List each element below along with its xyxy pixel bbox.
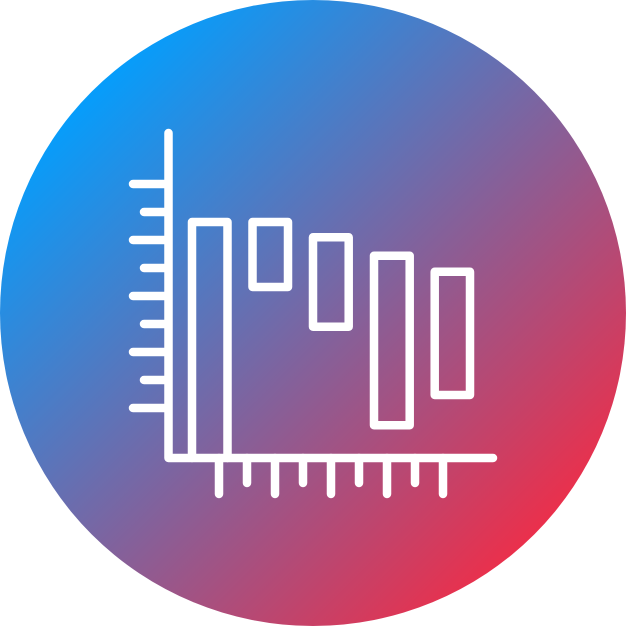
bar 4 <box>374 256 410 425</box>
bar 2 <box>252 222 288 287</box>
bar 3 <box>313 237 349 327</box>
axes <box>168 133 493 458</box>
bar 1 <box>192 222 228 458</box>
vertical axis ticks <box>133 184 168 408</box>
bar 5 <box>435 272 470 395</box>
chart line art <box>133 133 493 494</box>
horizontal axis ticks <box>219 458 443 494</box>
